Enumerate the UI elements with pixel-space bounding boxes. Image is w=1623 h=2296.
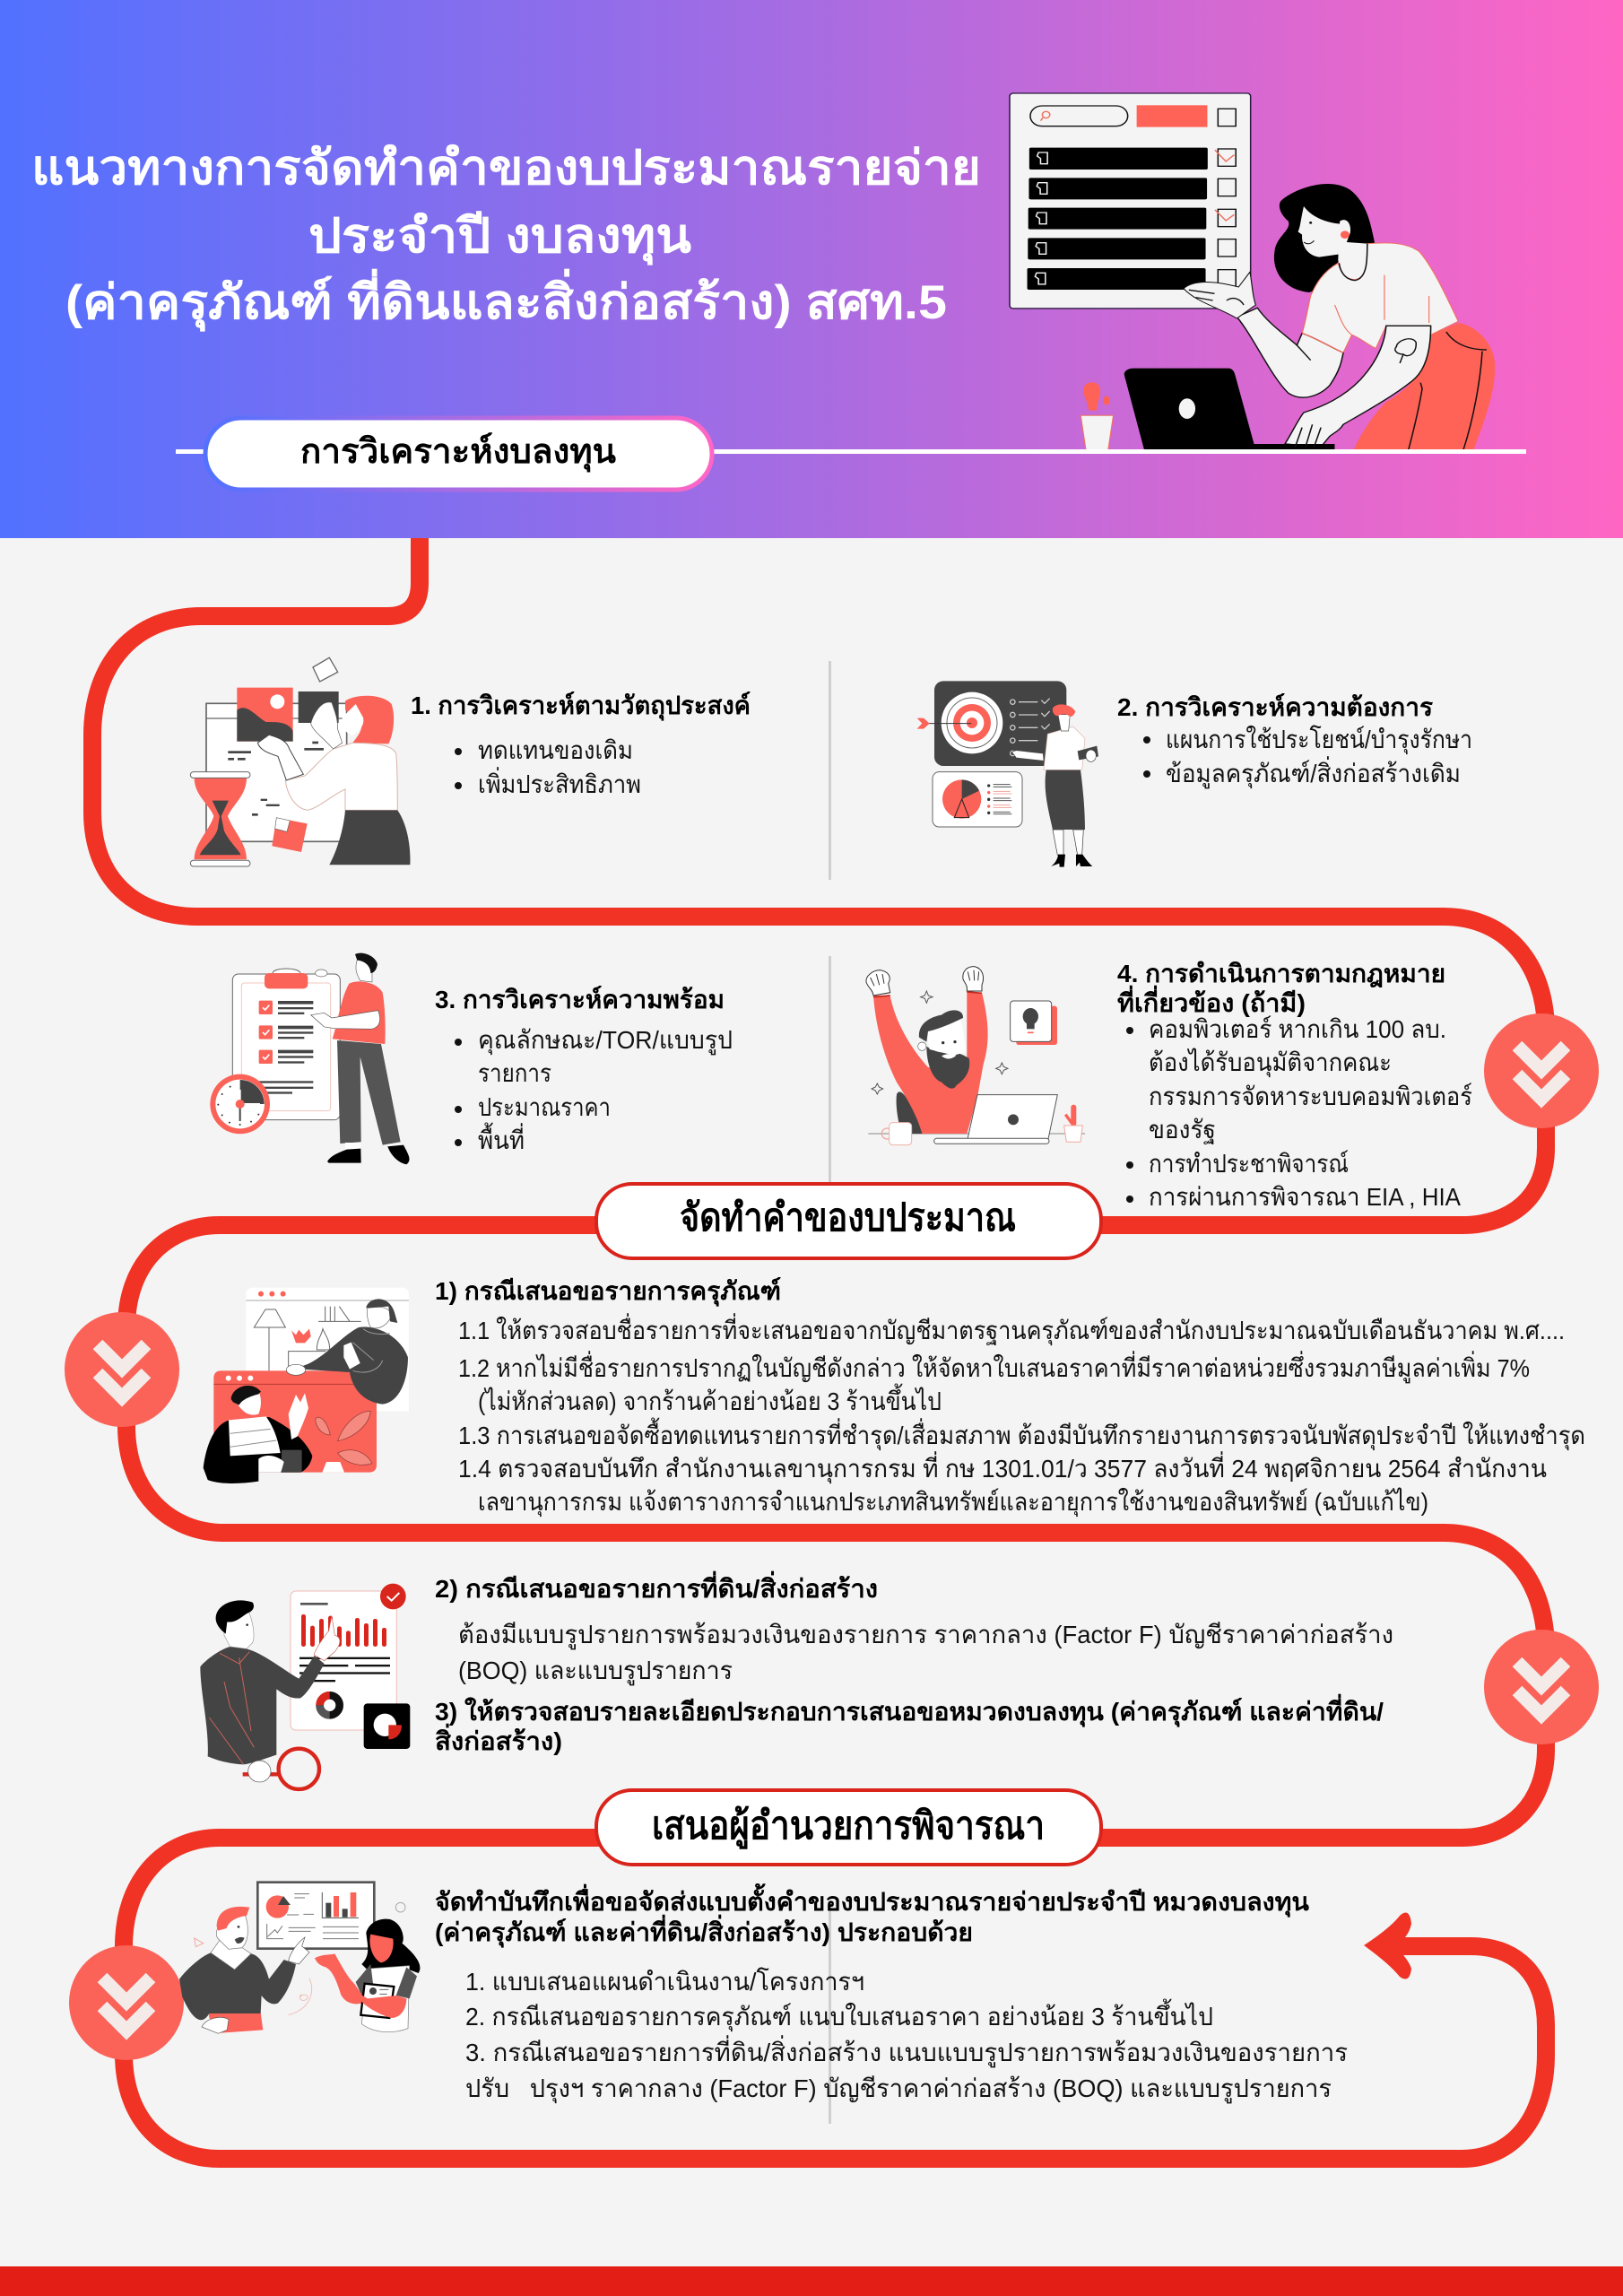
- submission heading: จัดทำบันทึกเพื่อขอจัดส่งแบบตั้งคำของบประมาณรายจ่ายประจำปี หมวดงบลงทุน: [435, 1883, 1309, 1918]
- title: ประจำปี งบลงทุน: [308, 210, 691, 265]
- illustration: woman with target board and pie chart: [917, 681, 1098, 867]
- text case 2: [458, 1621, 1393, 1686]
- illustration: woman arranging pictures and hourglass: [190, 657, 410, 866]
- heading 4: [1117, 960, 1445, 1017]
- panel: analysis 1 objectives: [190, 657, 751, 866]
- illustration: man and woman in front of presentation board: [179, 1883, 420, 2033]
- items 1.1 to 1.4: เลขานุการกรม แจ้งตารางการจำแนกประเภทสินทรัพย์และอายุการใช้งานของสินทรัพย์ (ฉบับแก้ไข): [478, 1487, 1428, 1518]
- bullets 4: กรรมการจัดหาระบบคอมพิวเตอร์: [1149, 1083, 1472, 1110]
- pill: การวิเคราะห์งบลงทุน: [205, 418, 712, 490]
- items 1.1 to 1.4: 1.2 หากไม่มีชื่อรายการปรากฏในบัญชีดังกล่าว ให้จัดหาใบเสนอราคาที่มีราคาต่อหน่วยซึ่งรวมภาษีมูลค่าเพิ่ม 7%: [458, 1351, 1530, 1384]
- illustration: man with clipboard and clock: [210, 953, 410, 1164]
- panel: request case 1 equipment: [204, 1277, 1585, 1518]
- panel: submit to director: [179, 1883, 1348, 2104]
- pill: จัดทำคำของบประมาณ: [596, 1184, 1101, 1258]
- pill: เสนอผู้อำนวยการพิจารณา: [596, 1790, 1101, 1865]
- submission heading: [435, 1883, 1309, 1948]
- text case 2: (BOQ) และแบบรูปรายการ: [458, 1657, 733, 1686]
- bullets 3: ประมาณราคา: [478, 1093, 611, 1121]
- text case 2: ต้องมีแบบรูปรายการพร้อมวงเงินของรายการ ราคากลาง (Factor F) บัญชีราคาค่าก่อสร้าง: [458, 1621, 1393, 1650]
- title: (ค่าครุภัณฑ์ ที่ดินและสิ่งก่อสร้าง) สศท.5: [65, 268, 947, 332]
- bullets 4: คอมพิวเตอร์ หากเกิน 100 ลบ.: [1149, 1015, 1446, 1043]
- heading 1: 1. การวิเคราะห์ตามวัตถุประสงค์: [411, 691, 751, 721]
- items 1.1 to 1.4: (ไม่หักส่วนลด) จากร้านค้าอย่างน้อย 3 ร้านขึ้นไป: [478, 1383, 942, 1415]
- submission list: 2. กรณีเสนอขอรายการครุภัณฑ์ แนบใบเสนอราคา อย่างน้อย 3 ร้านขึ้นไป: [465, 1998, 1213, 2032]
- bullets 3: [455, 1026, 733, 1154]
- bullets 4: การทำประชาพิจารณ์: [1149, 1150, 1349, 1178]
- bullets 4: การผ่านการพิจารณา EIA , HIA: [1149, 1183, 1461, 1211]
- title: แนวทางการจัดทำคำของบประมาณรายจ่าย: [31, 142, 981, 195]
- heading item 3: 3) ให้ตรวจสอบรายละเอียดประกอบการเสนอขอหมวดงบลงทุน (ค่าครุภัณฑ์ และค่าที่ดิน/: [435, 1693, 1384, 1727]
- panel: analysis 2 needs: [917, 681, 1472, 867]
- illustration: bearded man cheering at laptop: [866, 967, 1085, 1145]
- badge: chevrons 2: [65, 1312, 179, 1427]
- heading 4: 4. การดำเนินการตามกฎหมาย: [1117, 960, 1445, 988]
- bullets 3: รายการ: [478, 1059, 551, 1087]
- bullets 1: ทดแทนของเดิม: [478, 736, 633, 764]
- header white line: [176, 449, 1526, 454]
- heading 2: 2. การวิเคราะห์ความต้องการ: [1117, 693, 1433, 721]
- heading item 3: สิ่งก่อสร้าง): [435, 1723, 562, 1755]
- illustration: man presenting report with magnifier: [200, 1584, 410, 1789]
- arrow head: [1364, 1913, 1411, 1979]
- heading item 3: [435, 1693, 1384, 1755]
- bullets 2: แผนการใช้ประโยชน์/บำรุงรักษา: [1166, 725, 1472, 755]
- badge: chevrons 1: [1484, 1013, 1599, 1128]
- pill: การวิเคราะห์งบลงทุน: การวิเคราะห์งบลงทุน: [300, 432, 616, 473]
- submission heading: (ค่าครุภัณฑ์ และค่าที่ดิน/สิ่งก่อสร้าง) ประกอบด้วย: [435, 1914, 973, 1948]
- submission list: 1. แบบเสนอแผนดำเนินงาน/โครงการฯ: [465, 1967, 864, 1996]
- title: [31, 142, 981, 332]
- bullets 4: [1126, 1015, 1472, 1211]
- panel: request case 2 land and construction: [200, 1570, 1393, 1789]
- footer bar: [0, 2266, 1623, 2296]
- items 1.1 to 1.4: 1.4 ตรวจสอบบันทึก สำนักงานเลขานุการกรม ที่ กษ 1301.01/ว 3577 ลงวันที่ 24 พฤศจิกายน 2564 สำนักงาน: [458, 1451, 1547, 1484]
- bullets 1: เพิ่มประสิทธิภาพ: [478, 767, 641, 798]
- bullets 3: คุณลักษณะ/TOR/แบบรูป: [478, 1026, 733, 1056]
- vertical dividers: [829, 661, 831, 2124]
- badge: chevrons 3: [1484, 1630, 1599, 1744]
- bullets 2: ข้อมูลครุภัณฑ์/สิ่งก่อสร้างเดิม: [1166, 756, 1461, 789]
- bullets 1: [455, 736, 641, 798]
- illustration: two people in browser windows: [204, 1288, 409, 1483]
- heading case 1: 1) กรณีเสนอขอรายการครุภัณฑ์: [435, 1277, 781, 1307]
- bullets 3: พื้นที่: [478, 1122, 525, 1154]
- header banner: [0, 0, 1623, 538]
- pill: เสนอผู้อำนวยการพิจารณา: เสนอผู้อำนวยการพิจารณา: [652, 1805, 1045, 1849]
- heading 4: ที่เกี่ยวข้อง (ถ้ามี): [1117, 985, 1306, 1017]
- submission list: ปรับ ปรุงฯ ราคากลาง (Factor F) บัญชีราคาค่าก่อสร้าง (BOQ) และแบบรูปรายการ: [465, 2074, 1332, 2104]
- heading 3: 3. การวิเคราะห์ความพร้อม: [435, 986, 725, 1013]
- panel: analysis 3 readiness: [210, 953, 733, 1164]
- winding red path: [92, 538, 1546, 2159]
- badge: chevrons 4: [69, 1945, 184, 2060]
- items 1.1 to 1.4: [458, 1313, 1585, 1518]
- bullets 4: ต้องได้รับอนุมัติจากคณะ: [1149, 1048, 1392, 1078]
- panel: analysis 4 law: [866, 960, 1472, 1211]
- heading case 2: 2) กรณีเสนอขอรายการที่ดิน/สิ่งก่อสร้าง: [435, 1570, 878, 1603]
- submission list: 3. กรณีเสนอขอรายการที่ดิน/สิ่งก่อสร้าง แนบแบบรูปรายการพร้อมวงเงินของรายการ: [465, 2035, 1348, 2068]
- illustration: woman at checklist board with laptop: [1010, 93, 1495, 450]
- pill: จัดทำคำของบประมาณ: จัดทำคำของบประมาณ: [680, 1196, 1016, 1239]
- submission list: [465, 1967, 1348, 2104]
- bullets 4: ของรัฐ: [1149, 1116, 1216, 1144]
- bullets 2: [1143, 725, 1472, 789]
